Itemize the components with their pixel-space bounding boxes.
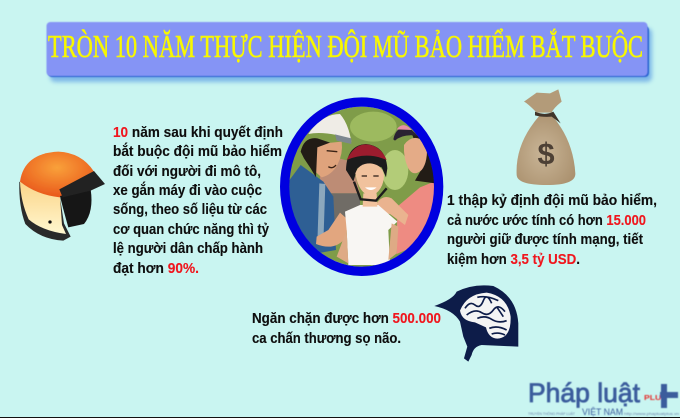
text block: left paragraph: đạt hơn 90%. (113, 261, 199, 277)
logo: Pháp luật Plus: http://www.phapluatplus.vn (624, 411, 679, 416)
logo: Pháp luật Plus: TRUYỀN THÔNG PHÁP LUẬT (528, 411, 575, 416)
text block: left paragraph: lệ người dân chấp hành (113, 241, 263, 257)
icon: orange helmet (19, 152, 105, 241)
logo: Pháp luật Plus: Pháp luật (528, 378, 640, 408)
text block: left paragraph: bắt buộc đội mũ bảo hiểm (113, 142, 282, 160)
text block: left paragraph: cơ quan chức năng thì tỷ (113, 222, 269, 238)
text block: left paragraph: sống, theo số liệu từ các (113, 202, 267, 218)
text block: right paragraph (447, 193, 657, 268)
photo: family with helmets in blue ring (280, 100, 443, 273)
text block: left paragraph (113, 125, 283, 277)
text block: right paragraph: 1 thập kỷ định đội mũ bảo hiểm, (447, 193, 657, 209)
text block: bottom paragraph: ca chấn thương sọ não. (252, 331, 401, 347)
man (288, 165, 336, 253)
logo: Pháp luật Plus: VIỆT NAM (582, 407, 623, 417)
child (345, 205, 397, 265)
title banner (46, 22, 652, 82)
icon: helmet with brain (434, 285, 518, 362)
icon: money bag: $ (537, 137, 555, 171)
text block: left paragraph: đối với người đi mô tô, (113, 164, 261, 180)
text block: left paragraph: 10 năm sau khi quyết định (113, 125, 283, 141)
icon: money bag (517, 89, 575, 185)
text block: bottom paragraph (252, 311, 441, 347)
text block: right paragraph: kiệm hơn 3,5 tỷ USD. (447, 252, 580, 268)
text block: right paragraph: người giữ được tính mạng, tiết (447, 232, 643, 248)
logo: Pháp luật Plus (528, 378, 679, 417)
text block: bottom paragraph: Ngăn chặn được hơn 500.000 (252, 311, 441, 327)
text block: left paragraph: xe gắn máy đi vào cuộc (113, 181, 262, 199)
logo: Pháp luật Plus: PLUS (644, 393, 667, 402)
text block: right paragraph: cả nước ước tính có hơn 15.000 (447, 213, 646, 229)
woman (397, 181, 437, 254)
